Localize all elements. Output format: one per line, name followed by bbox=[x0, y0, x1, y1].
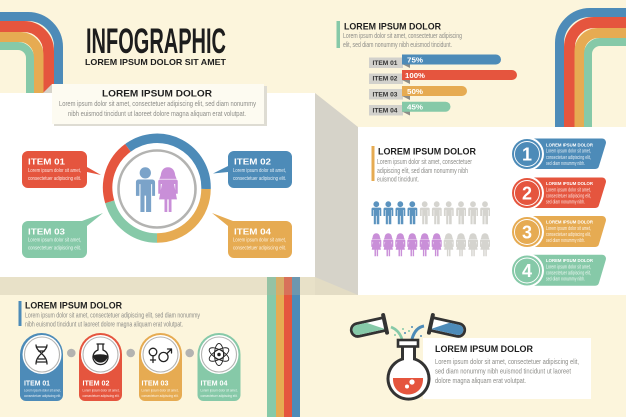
panel: bottom right text card: Lorem ipsum dolor sit amet, consectetuer adipiscing elit, bbox=[435, 357, 579, 366]
bar: item 01 bbox=[369, 54, 501, 68]
card: item 01 DNA: Lorem ipsum dolor sit amet, bbox=[24, 388, 61, 392]
numbered badge 3 bbox=[510, 215, 606, 249]
bar chart bbox=[369, 54, 517, 116]
bar: item 04: ITEM 04 bbox=[372, 108, 398, 114]
icon: gender symbols bbox=[149, 348, 172, 362]
text block: bottom left heading: Lorem ipsum dolor sit amet, consectetuer adipiscing elit, sed diam nonummy bbox=[25, 310, 200, 320]
numbered badge 1: LOREM IPSUM DOLOR bbox=[546, 142, 594, 148]
text block: top right heading bbox=[336, 21, 462, 49]
card: item 01 DNA: ITEM 01 bbox=[24, 380, 50, 388]
icon: man bbox=[136, 167, 155, 212]
numbered badge 4: consectetuer adipiscing elit, bbox=[546, 270, 591, 276]
text block: top right heading: elit, sed diam nonummy nibh euismod tincidunt. bbox=[343, 40, 452, 49]
card: item 01 DNA bbox=[20, 333, 63, 401]
numbered badge 4 bbox=[510, 254, 606, 288]
callout: item 03: ITEM 03 bbox=[28, 226, 65, 236]
panel: bottom right text card bbox=[423, 338, 591, 399]
callout: item 03: Lorem ipsum dolor sit amet, bbox=[28, 238, 81, 244]
text block: bottom left heading: nibh euismod tincidunt ut laoreet dolore magna aliquam erat volutpat. bbox=[25, 320, 183, 328]
callout: item 01: ITEM 01 bbox=[28, 156, 65, 166]
card: item 03 gender: consectetuer adipiscing elit. bbox=[142, 393, 178, 398]
callout: item 02: Lorem ipsum dolor sit amet, bbox=[233, 168, 286, 174]
rainbow: top left bbox=[0, 16, 58, 95]
numbered badge 4: Lorem ipsum dolor sit amet, bbox=[546, 264, 591, 270]
pictogram: women row bbox=[371, 233, 490, 256]
text block: right panel heading: LOREM IPSUM DOLOR bbox=[378, 146, 476, 158]
callout: item 02: ITEM 02 bbox=[234, 156, 271, 166]
icon: right test tube bbox=[429, 315, 467, 340]
callout: item 04 bbox=[212, 213, 292, 258]
callout: item 01: consectetuer adipiscing elit. bbox=[28, 176, 81, 182]
pictogram: men row bbox=[371, 201, 490, 224]
text block: right panel heading: adipiscing elit, sed diam nonummy nibh bbox=[377, 166, 468, 175]
panel: header card bbox=[52, 84, 267, 126]
callout: item 01: Lorem ipsum dolor sit amet, bbox=[28, 168, 81, 174]
icon: round-bottom flask bbox=[388, 340, 429, 399]
bar: item 04 bbox=[369, 102, 450, 116]
panel: bottom right text card: LOREM IPSUM DOLOR bbox=[435, 344, 533, 355]
callout: item 04: consectetuer adipiscing elit. bbox=[233, 246, 286, 252]
callout: item 03: consectetuer adipiscing elit. bbox=[28, 246, 81, 252]
card: item 02 flask: Lorem ipsum dolor sit amet, bbox=[82, 388, 120, 392]
numbered badge 2: consectetuer adipiscing elit, bbox=[546, 193, 591, 199]
numbered badge 3: 3 bbox=[522, 222, 532, 242]
icon: DNA bbox=[36, 345, 47, 364]
callout: item 03 bbox=[22, 213, 103, 258]
text block: top right heading: Lorem ipsum dolor sit amet, consectetuer adipiscing bbox=[343, 31, 462, 40]
card: item 02 flask: ITEM 02 bbox=[82, 380, 110, 388]
text block: bottom left heading bbox=[18, 300, 200, 328]
stripes: lower centre bbox=[267, 277, 300, 417]
numbered badge 1 bbox=[510, 137, 606, 171]
bar: item 03: ITEM 03 bbox=[372, 92, 398, 98]
card: item 04 atom: Lorem ipsum dolor sit amet, bbox=[200, 388, 238, 392]
bar: item 02: ITEM 02 bbox=[372, 76, 398, 82]
card: item 02 flask: consectetuer adipiscing elit. bbox=[82, 393, 120, 398]
numbered badge 2: LOREM IPSUM DOLOR bbox=[546, 181, 594, 186]
text block: top right heading: LOREM IPSUM DOLOR bbox=[344, 22, 441, 32]
numbered badge 3: consectetuer adipiscing elit, bbox=[546, 232, 591, 238]
numbered badge 1: sed diam nonummy nibh. bbox=[546, 161, 585, 167]
connector dots bbox=[67, 349, 194, 357]
bar: item 03: 50% bbox=[407, 87, 423, 96]
panel: right white band bbox=[358, 127, 626, 295]
icon: atom bbox=[207, 344, 231, 366]
numbered badge 1: 1 bbox=[522, 144, 532, 164]
text block: right panel heading: Lorem ipsum dolor sit amet, consectetuer bbox=[377, 157, 472, 166]
panel: header card: LOREM IPSUM DOLOR bbox=[102, 88, 212, 100]
text block: right panel heading bbox=[372, 146, 476, 184]
card: item 02 flask bbox=[79, 333, 122, 401]
panel: header card: nibh euismod tincidunt ut laoreet dolore magna aliquam erat volutpat. bbox=[68, 109, 246, 118]
panel: header card: Lorem ipsum dolor sit amet, consectetuer adipiscing elit, sed diam nonummy bbox=[59, 99, 256, 108]
icon: left test tube bbox=[349, 315, 387, 340]
card: item 03 gender bbox=[139, 333, 182, 401]
title: LOREM IPSUM DOLOR SIT AMET bbox=[85, 58, 226, 67]
numbered badge 1: Lorem ipsum dolor sit amet, bbox=[546, 149, 591, 155]
icon: pouring streams bbox=[391, 326, 424, 339]
callout: item 02: consectetuer adipiscing elit. bbox=[233, 176, 286, 182]
card: item 04 atom: ITEM 04 bbox=[200, 380, 228, 388]
numbered badge 2 bbox=[510, 176, 606, 210]
card: item 01 DNA: consectetuer adipiscing elit. bbox=[24, 393, 61, 398]
numbered badge 3: sed diam nonummy nibh. bbox=[546, 238, 585, 244]
bar: item 03 bbox=[369, 86, 467, 100]
numbered badge 4: LOREM IPSUM DOLOR bbox=[546, 258, 594, 263]
numbered badge 4: sed diam nonummy nibh. bbox=[546, 277, 585, 283]
numbered badge 2: sed diam nonummy nibh. bbox=[546, 200, 585, 206]
numbered badge 4: 4 bbox=[522, 261, 532, 281]
rainbow: top right bbox=[560, 12, 626, 129]
card: item 03 gender: ITEM 03 bbox=[142, 380, 169, 388]
numbered badge 2: 2 bbox=[522, 184, 532, 204]
panel: 3D white band shading bbox=[0, 84, 358, 295]
title: INFOGRAPHIC bbox=[86, 22, 226, 61]
numbered badge 3: Lorem ipsum dolor sit amet, bbox=[546, 226, 591, 232]
icon: woman bbox=[158, 167, 178, 212]
text block: right panel heading: euismod tincidunt. bbox=[377, 174, 419, 184]
text block: bottom left heading: LOREM IPSUM DOLOR bbox=[25, 300, 122, 312]
bar: item 01: 75% bbox=[407, 56, 423, 64]
numbered badge 1: consectetuer adipiscing elit, bbox=[546, 155, 591, 161]
bar: item 04: 45% bbox=[407, 103, 423, 112]
panel: bottom right text card: dolore magna aliquam erat volutpat. bbox=[435, 376, 526, 385]
numbered badge 2: Lorem ipsum dolor sit amet, bbox=[546, 187, 591, 193]
callout: item 01 bbox=[22, 151, 101, 188]
bar: item 02 bbox=[369, 70, 517, 84]
title bbox=[85, 22, 226, 67]
bar: item 02: 100% bbox=[405, 71, 425, 80]
callout: item 02 bbox=[213, 151, 292, 188]
bar: item 01: ITEM 01 bbox=[372, 61, 398, 67]
card: item 04 atom bbox=[198, 333, 240, 401]
callout: item 04: ITEM 04 bbox=[234, 226, 271, 236]
icon: flask bbox=[93, 344, 108, 365]
donut chart with figures bbox=[108, 138, 206, 238]
panel: main white band bbox=[0, 93, 315, 277]
card: item 03 gender: Lorem ipsum dolor sit amet, bbox=[142, 388, 178, 392]
card: item 04 atom: consectetuer adipiscing elit. bbox=[200, 393, 238, 398]
callout: item 04: Lorem ipsum dolor sit amet, bbox=[233, 238, 286, 244]
panel: bottom right text card: sed diam nonummy nibh euismod tincidunt ut laoreet bbox=[435, 366, 571, 376]
numbered badge 3: LOREM IPSUM DOLOR bbox=[546, 220, 594, 224]
